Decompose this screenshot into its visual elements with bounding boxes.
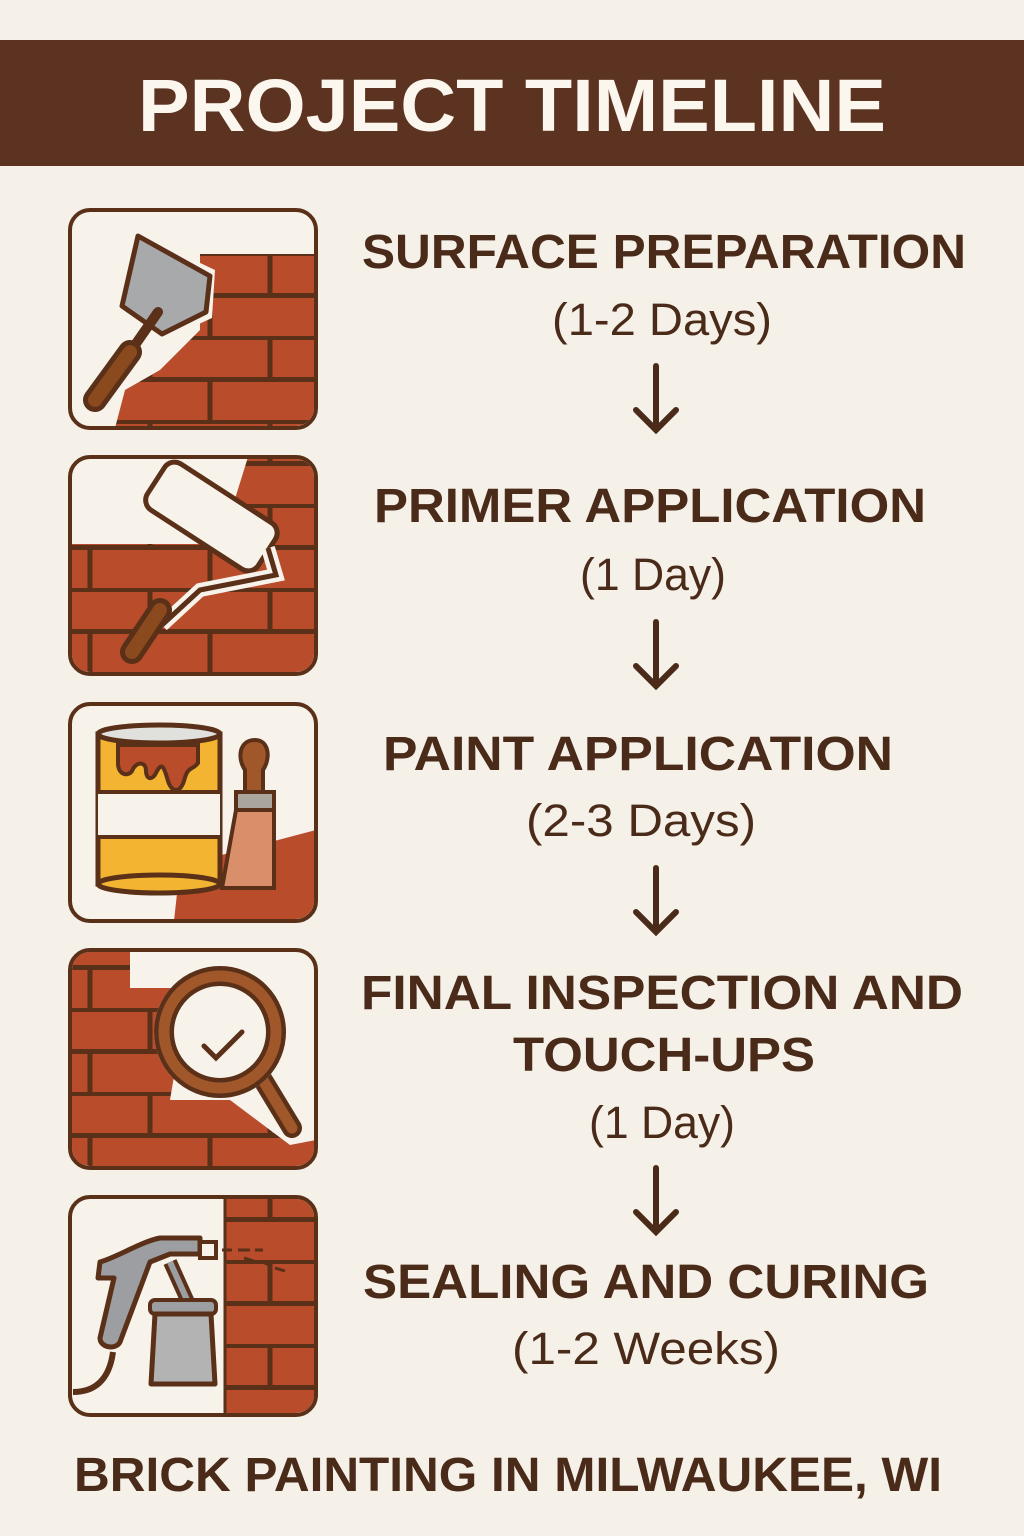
icon: paint roller on brick bbox=[70, 457, 316, 674]
icon: trowel on brick bbox=[70, 210, 316, 428]
step 4 text: TOUCH-UPS bbox=[513, 1029, 815, 1082]
step 5 text bbox=[363, 1256, 929, 1374]
icon: paint can and brush bbox=[70, 704, 316, 921]
arrow 1 bbox=[636, 366, 676, 430]
step 3 text: (2-3 Days) bbox=[526, 795, 756, 846]
step 2 text: (1 Day) bbox=[580, 549, 726, 600]
step 2 text bbox=[374, 480, 926, 600]
arrow 3 bbox=[636, 868, 676, 932]
step 3 text: PAINT APPLICATION bbox=[383, 728, 893, 781]
arrow 4 bbox=[636, 1168, 676, 1232]
icon: magnifier with check on brick bbox=[70, 950, 316, 1168]
icon: spray gun and brick bbox=[70, 1197, 316, 1415]
step 1 text: (1-2 Days) bbox=[552, 294, 772, 345]
step 5 text: (1-2 Weeks) bbox=[512, 1323, 780, 1374]
header band bbox=[0, 40, 1024, 166]
step 3 text bbox=[383, 728, 893, 846]
step 5 text: SEALING AND CURING bbox=[363, 1256, 929, 1309]
step 1 text bbox=[362, 226, 966, 345]
title: PROJECT TIMELINE bbox=[138, 64, 886, 147]
step 4 text bbox=[361, 967, 963, 1148]
arrow 2 bbox=[636, 622, 676, 686]
step 4 text: FINAL INSPECTION AND bbox=[361, 967, 963, 1020]
step 4 text: (1 Day) bbox=[589, 1097, 735, 1148]
step 1 text: SURFACE PREPARATION bbox=[362, 226, 966, 279]
step 2 text: PRIMER APPLICATION bbox=[374, 480, 926, 533]
footer: BRICK PAINTING IN MILWAUKEE, WI bbox=[74, 1449, 942, 1502]
